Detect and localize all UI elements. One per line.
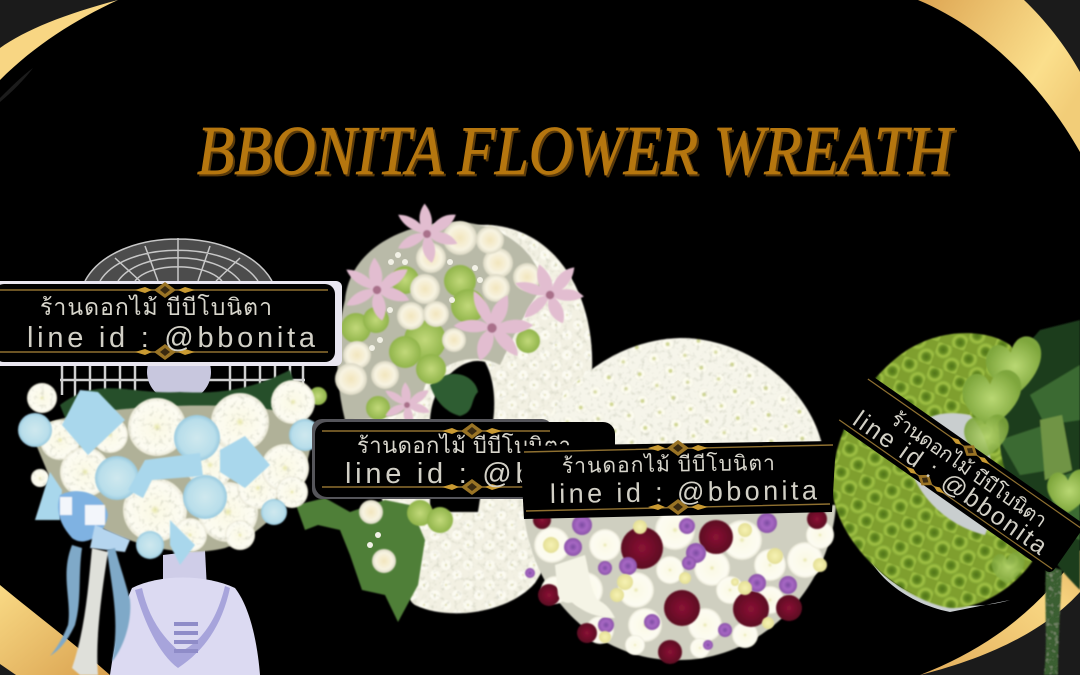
- banner: top left, white frame: [0, 281, 342, 366]
- line id: line id : @bbonita: [27, 322, 316, 354]
- gold rules: [839, 379, 1080, 569]
- pink lilies: [346, 204, 589, 427]
- title: BBONITA FLOWER WREATH: [197, 113, 955, 190]
- banner: right of centre: [520, 440, 836, 519]
- gold rules: [524, 445, 833, 511]
- grey hole backing: [904, 410, 998, 545]
- white roses: [335, 221, 541, 573]
- lower mixed flower base: [523, 505, 836, 660]
- fan neck and base: [110, 550, 260, 675]
- gold swoosh: bottom right: [920, 550, 1080, 675]
- green ring: [832, 333, 1045, 608]
- line id: line id : @bbonita: [345, 458, 634, 490]
- fan grille top: [85, 238, 272, 281]
- shop name: ร้านดอกไม้ บีบีโบนิตา: [40, 294, 272, 320]
- paper bows: [35, 390, 270, 565]
- gold rules: [0, 290, 328, 352]
- blue carnations: [18, 413, 321, 559]
- banner: diagonal on green wreath: [834, 373, 1080, 575]
- cream accents: [543, 520, 827, 643]
- faint dark sliver: [0, 68, 33, 102]
- gold swoosh: top right: [918, 0, 1080, 152]
- burgundy carnations: [533, 509, 827, 664]
- shop name: ร้านดอกไม้ บีบีโบนิตา: [562, 451, 775, 478]
- gold swoosh: bottom left: [0, 585, 110, 675]
- green foliage behind flowers: [60, 370, 300, 430]
- baby's breath sprigs: [367, 252, 483, 548]
- lower left foliage: [296, 498, 425, 622]
- white mums: [534, 510, 834, 658]
- ribbon tails: [50, 545, 130, 675]
- grey bottom edge: [870, 560, 1010, 612]
- gold rules: [322, 431, 550, 487]
- white dome: [536, 338, 822, 445]
- gingham ribbon bow: [58, 491, 130, 552]
- wreath: white ring with pink lilies: [296, 204, 592, 622]
- purple stock: [525, 513, 797, 650]
- white chrysanthemums: [27, 380, 315, 552]
- anthurium leaves: [963, 334, 1080, 584]
- ornaments: [442, 423, 502, 439]
- white lily: [555, 555, 615, 618]
- gold swoosh: top left: [0, 0, 118, 80]
- inner fern leaves: [430, 374, 478, 416]
- green carnations: [309, 265, 540, 533]
- shop name: ร้านดอกไม้ บีบีโบนิตา: [357, 433, 571, 458]
- ornaments: [648, 440, 708, 456]
- white chrysanthemum ring: [344, 225, 592, 613]
- ornaments: [135, 282, 195, 298]
- shop name: ร้านดอกไม้ บีบีโบนิตา: [886, 407, 1051, 532]
- line id: line id : @bbonita: [848, 405, 1052, 560]
- hanging amaranth: [1044, 565, 1062, 675]
- fan hub: [147, 342, 211, 402]
- fan grille lower: [60, 366, 305, 402]
- line id: line id : @bbonita: [550, 475, 818, 509]
- wreath: white dome with burgundy and purple flowers: [523, 338, 836, 664]
- cream core of arrangement: [30, 406, 311, 552]
- top bouquet base: [338, 222, 540, 420]
- wreath: green chrysanthemum ring: [832, 320, 1080, 675]
- banner: centre: [312, 419, 634, 499]
- ornaments: [947, 432, 994, 470]
- tropical foliage: [999, 320, 1080, 590]
- fan with blue wreath: [18, 238, 321, 675]
